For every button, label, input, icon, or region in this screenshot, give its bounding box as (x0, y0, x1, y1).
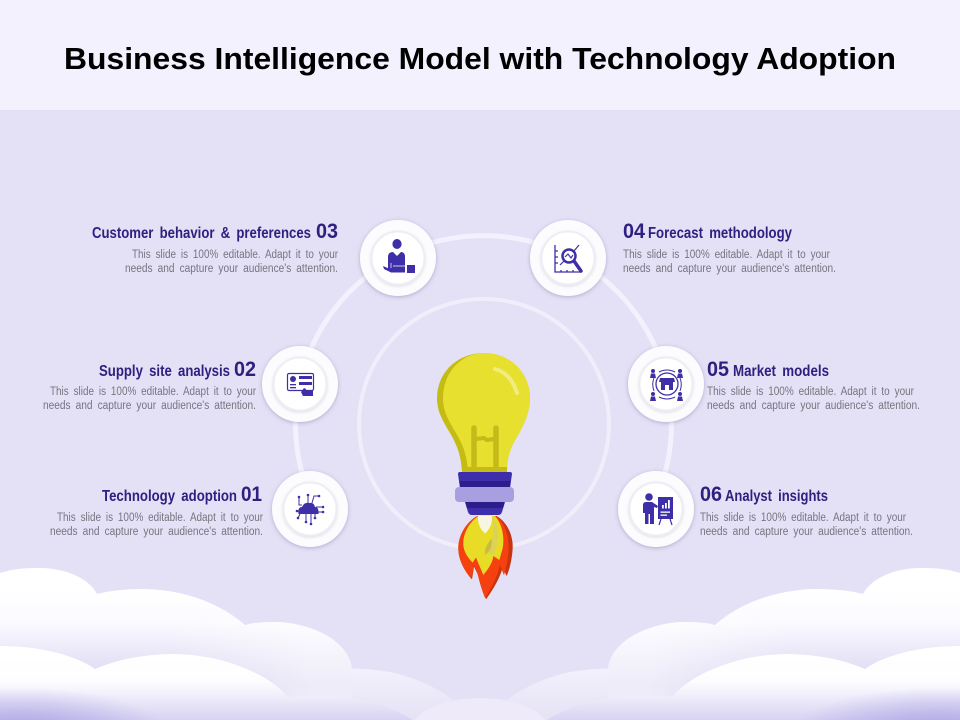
rocket bulb (437, 353, 530, 599)
header band (0, 0, 960, 110)
text block 03 (92, 219, 338, 275)
filament (463, 428, 507, 470)
inner ring (359, 299, 609, 549)
text block 06: This slide is 100% editable. Adapt it to your (700, 512, 906, 524)
icon: market store with people (650, 369, 683, 401)
title: Business Intelligence Model with Technology Adoption (64, 41, 896, 76)
text block 05: needs and capture your audience's attention. (707, 400, 920, 412)
icon node 03 (360, 220, 436, 296)
outer ring (296, 236, 671, 509)
text block 01: Technology adoption (102, 488, 237, 505)
text block 02: needs and capture your audience's attention. (43, 400, 256, 412)
text block 04: Forecast methodology (648, 225, 792, 242)
lamp base (455, 472, 514, 515)
text block 05: 05 (707, 357, 729, 381)
text block 01 (50, 482, 263, 538)
icon: cloud circuit (296, 494, 324, 525)
icon node 04 (530, 220, 606, 296)
text block 04: 04 (623, 219, 645, 243)
icon node 05 (628, 346, 704, 422)
bulb glass (437, 353, 530, 472)
text block 03: needs and capture your audience's attention. (125, 263, 338, 275)
icon: person with box (383, 239, 415, 273)
icon node 06 (618, 471, 694, 547)
text block 04: needs and capture your audience's attention. (623, 263, 836, 275)
text block 03: 03 (316, 219, 338, 243)
text block 06 (700, 482, 913, 538)
right clouds (480, 568, 960, 720)
text block 01: needs and capture your audience's attention. (50, 526, 263, 538)
text block 02: This slide is 100% editable. Adapt it to your (50, 386, 256, 398)
text block 05: Market models (733, 363, 829, 380)
text block 06: 06 (700, 482, 722, 506)
text block 02: 02 (234, 357, 256, 381)
flame (458, 516, 513, 599)
icon: screen with hand (288, 374, 314, 396)
text block 04: This slide is 100% editable. Adapt it to your (623, 249, 830, 261)
text block 06: needs and capture your audience's attention. (700, 526, 913, 538)
left clouds (0, 568, 480, 720)
text block 03: Customer behavior & preferences (92, 225, 311, 242)
text block 06: Analyst insights (725, 488, 828, 505)
text block 03: This slide is 100% editable. Adapt it to your (132, 249, 338, 261)
icon node 02 (262, 346, 338, 422)
text block 04 (623, 219, 836, 275)
text block 01: 01 (241, 482, 262, 506)
text block 01: This slide is 100% editable. Adapt it to your (57, 512, 263, 524)
icon node 01 (272, 471, 348, 547)
text block 02: Supply site analysis (99, 363, 230, 380)
icon: presenter with board (643, 493, 673, 525)
text block 05 (707, 357, 920, 412)
text block 02 (43, 357, 256, 412)
icon: chart with magnifier (555, 245, 582, 272)
text block 05: This slide is 100% editable. Adapt it to your (707, 386, 914, 398)
